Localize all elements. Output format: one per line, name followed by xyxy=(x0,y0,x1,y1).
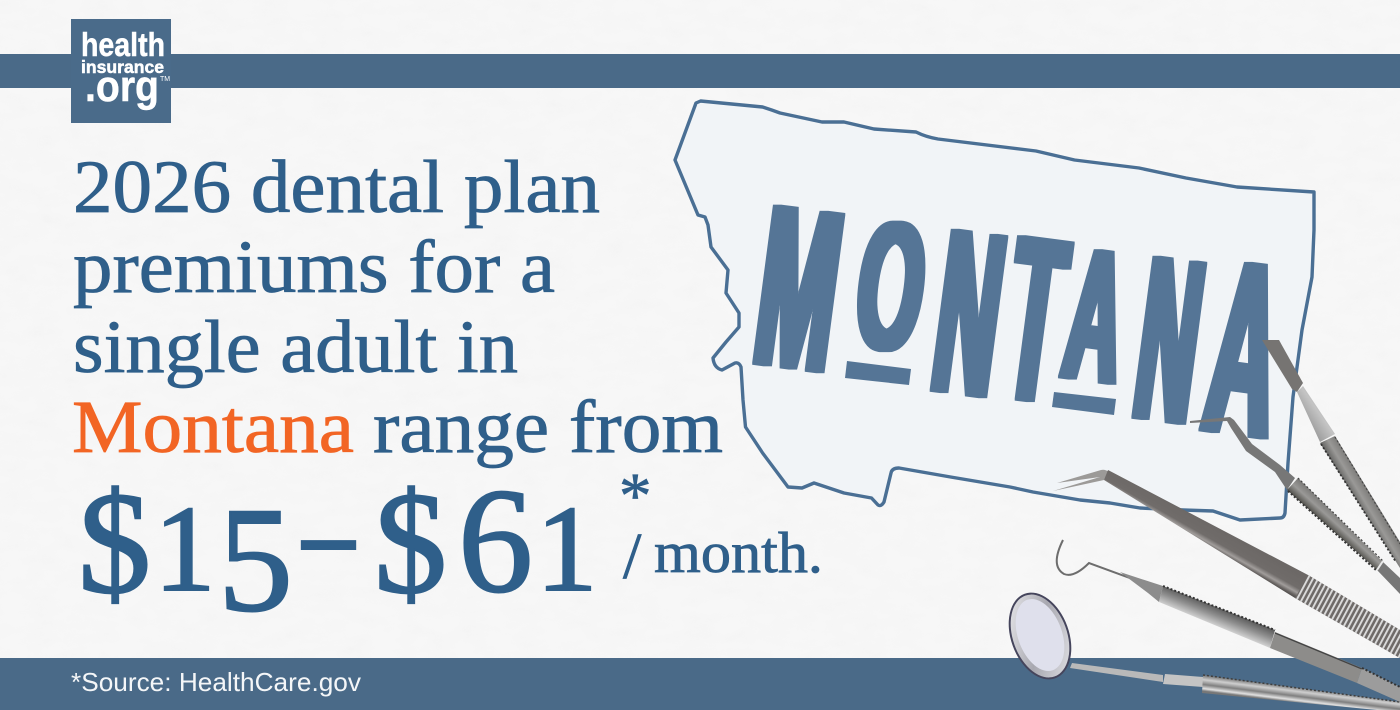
letters: A xyxy=(1193,207,1297,493)
icons: dental instruments xyxy=(997,340,1400,710)
letters: T xyxy=(992,185,1078,454)
instrument: dental mirror xyxy=(997,584,1400,710)
logo: healthinsurance.org: .org xyxy=(85,62,159,111)
price range: $ xyxy=(78,462,151,624)
heading text xyxy=(72,146,723,469)
letters: A xyxy=(1055,206,1137,425)
price range: 5 xyxy=(218,477,293,643)
letters: N xyxy=(1123,206,1215,475)
asterisk: * xyxy=(619,460,652,532)
letters: O xyxy=(846,181,936,393)
letters: N xyxy=(921,178,1017,448)
price range: 1 xyxy=(154,480,216,617)
heading text: Montana xyxy=(72,386,354,469)
per month label: / xyxy=(623,520,642,593)
top banner bar xyxy=(0,54,1400,88)
heading text: 2026 dental plan xyxy=(73,146,600,229)
heading text: premiums for a xyxy=(73,226,555,309)
underline bar beneath O xyxy=(845,361,911,385)
price range: – xyxy=(303,482,354,590)
source note: *Source: HealthCare.gov xyxy=(71,667,361,697)
per month label: month. xyxy=(654,520,823,585)
map: outline of Montana xyxy=(675,101,1314,520)
price range: 6 xyxy=(458,458,533,624)
bottom banner bar xyxy=(0,658,1400,710)
map lettering: MONTANA xyxy=(743,156,1297,493)
letters: M xyxy=(743,156,854,423)
price range: 1 xyxy=(536,480,598,617)
instrument: spatula xyxy=(1262,340,1400,568)
logo: healthinsurance.org: insurance xyxy=(81,57,164,77)
price range: $ xyxy=(374,462,447,624)
letters xyxy=(743,156,1297,493)
logo: healthinsurance.org xyxy=(71,19,171,123)
instrument: angled probe xyxy=(1190,417,1400,594)
heading text: range from xyxy=(373,386,723,469)
logo: healthinsurance.org: health xyxy=(81,26,165,63)
underline bar beneath A xyxy=(1052,392,1116,415)
instrument: curved tweezers xyxy=(1053,470,1400,658)
heading text: single adult in xyxy=(73,306,518,389)
logo: healthinsurance.org: TM xyxy=(160,76,170,83)
instrument: dental explorer hook xyxy=(1057,540,1400,702)
